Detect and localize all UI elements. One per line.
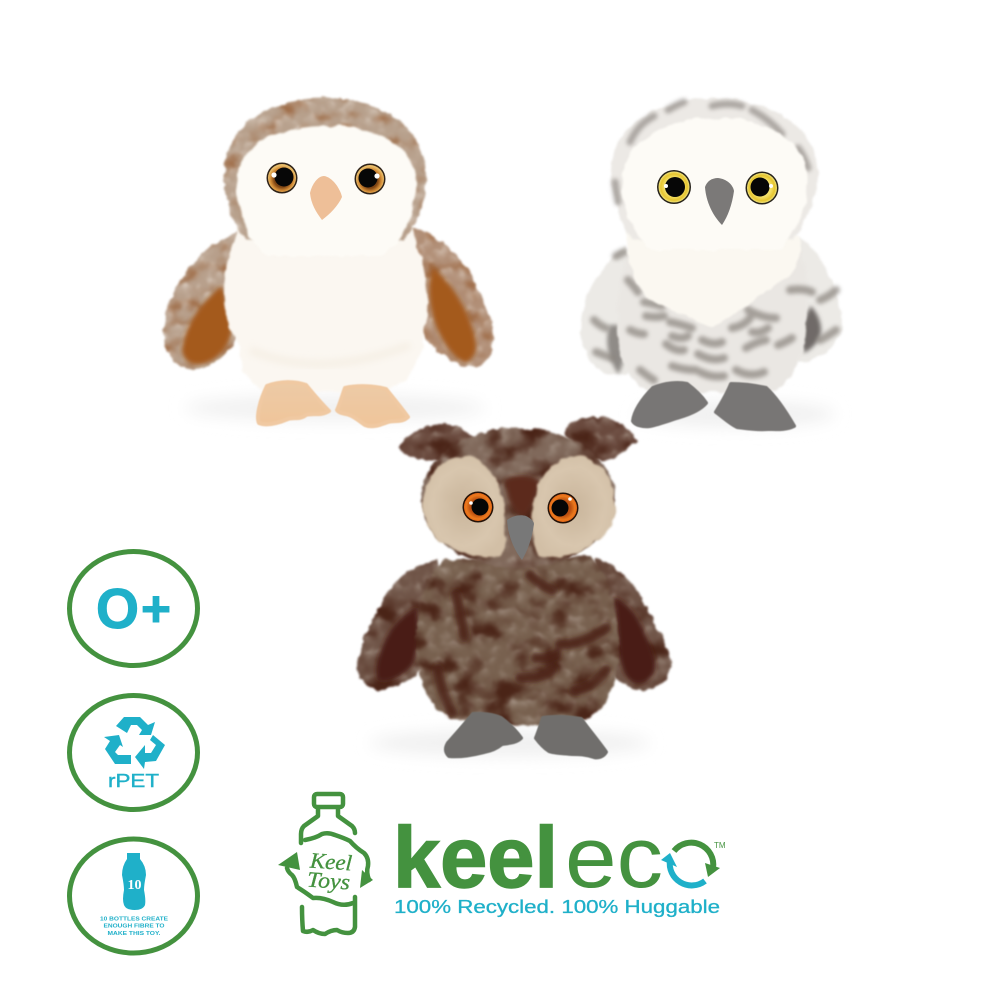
age label: +	[141, 581, 171, 637]
age label	[96, 577, 171, 641]
beak	[310, 176, 342, 220]
hood	[224, 98, 426, 240]
badge: rPET recycled	[70, 696, 198, 810]
owl: barn owl plush	[164, 98, 493, 426]
trademark: TM	[714, 841, 726, 850]
badge: ten bottles	[70, 839, 198, 953]
right eye	[354, 164, 386, 194]
face	[622, 118, 808, 250]
badge caption: ENOUGH FIBRE TO	[104, 924, 165, 930]
logo wordmark Keel Toys	[306, 847, 353, 895]
logo wordmark Keel Toys: Keel	[308, 847, 353, 875]
badge caption: 10 BOTTLES CREATE	[100, 916, 168, 922]
left foot	[446, 714, 521, 756]
right foot	[337, 386, 408, 426]
beak	[705, 178, 734, 225]
beak	[507, 515, 534, 560]
right foot	[536, 717, 606, 757]
left eye	[266, 162, 298, 194]
logo: keeleco wordmark: ec	[565, 810, 663, 906]
right wing	[780, 237, 842, 361]
logo: Keel Toys bottle	[278, 794, 373, 934]
left wing	[164, 232, 250, 369]
body blotches	[438, 575, 606, 712]
icon: recycle arrows	[104, 717, 165, 769]
brow patch	[505, 476, 540, 516]
head barring	[615, 102, 808, 202]
face	[237, 126, 416, 256]
ground shadow	[370, 730, 650, 756]
body	[416, 556, 618, 725]
badge: age 0+	[70, 552, 198, 666]
logo wordmark Keel Toys: Toys	[306, 867, 351, 895]
right wing	[593, 558, 672, 690]
right eye	[548, 492, 578, 524]
left eye	[462, 492, 494, 522]
right foot	[716, 384, 794, 429]
age label: O	[96, 577, 139, 641]
bottle number: 10	[128, 878, 142, 893]
left foot	[633, 383, 706, 426]
bib	[627, 229, 801, 328]
badge caption: MAKE THIS TOY.	[108, 931, 161, 937]
icon: circular o arrows	[661, 843, 720, 885]
chest shading	[250, 345, 410, 364]
rPET label: rPET	[108, 770, 159, 791]
left wing	[357, 560, 443, 690]
logo arrowheads	[278, 852, 373, 888]
body barring	[594, 252, 836, 380]
ground shadow	[635, 401, 835, 427]
left wing	[580, 246, 644, 376]
logo: keeleco wordmark: keel	[393, 810, 558, 906]
right ear	[563, 417, 637, 461]
left foot	[258, 382, 329, 424]
icon: bottle	[122, 853, 146, 910]
right wing	[403, 228, 493, 367]
right facial disc	[532, 456, 615, 557]
body	[224, 228, 427, 392]
logo: keeleco wordmark	[393, 810, 726, 906]
ground shadow	[185, 395, 485, 421]
left facial disc	[423, 456, 505, 557]
owl: brown long-eared owl plush	[357, 417, 672, 757]
left ear	[398, 424, 476, 461]
badge caption	[100, 916, 168, 937]
left eye	[657, 170, 691, 204]
body	[617, 238, 807, 392]
owl: snowy owl plush	[580, 98, 842, 429]
right eye	[746, 172, 778, 204]
logo tagline: 100% Recycled. 100% Huggable	[394, 896, 720, 917]
head	[421, 428, 615, 568]
head	[611, 98, 817, 240]
